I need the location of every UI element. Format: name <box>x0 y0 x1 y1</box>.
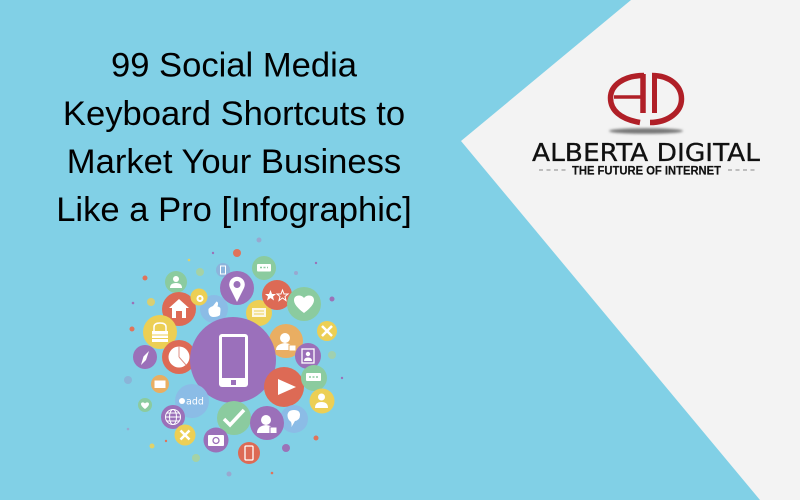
icon: gear <box>190 288 208 306</box>
title: Keyboard Shortcuts to <box>63 95 405 133</box>
icon: heart <box>287 287 321 321</box>
icon: mail <box>151 375 169 393</box>
icon: play <box>264 367 304 407</box>
icon: home <box>162 292 196 326</box>
icon: main phone <box>190 317 276 403</box>
icon: globe <box>161 405 185 429</box>
icon: user green <box>165 271 187 293</box>
icon: thumbs up <box>200 295 228 323</box>
icon: add <box>175 384 209 418</box>
icon: user orange <box>269 324 303 358</box>
logo tagline: THE FUTURE OF INTERNET <box>572 164 722 178</box>
icon: camera <box>204 428 228 452</box>
icon: check <box>217 401 251 435</box>
logo wordmark: ALBERTA DIGITAL <box>532 138 760 167</box>
icon: compass <box>133 345 157 369</box>
title: Market Your Business <box>67 143 401 181</box>
icon: close yellow lower <box>174 424 196 446</box>
icon: small heart <box>138 398 152 412</box>
logo: Alberta Digital <box>532 74 760 178</box>
icon: small phone <box>216 263 230 277</box>
icon: map pin <box>220 271 254 305</box>
title: 99 Social Media <box>111 46 358 84</box>
icon: stars <box>262 280 292 310</box>
icon: chat green <box>252 256 276 280</box>
logo mark: AD <box>610 74 682 122</box>
icon: user purple <box>250 406 284 440</box>
icon: close yellow <box>317 321 337 341</box>
decorative dots <box>124 238 343 476</box>
title <box>56 46 412 229</box>
icon: portrait <box>295 343 321 369</box>
social media icon cluster <box>124 238 343 476</box>
title: Like a Pro [Infographic] <box>56 191 412 229</box>
icon: thumbs down <box>280 405 308 433</box>
icon: lock <box>143 315 177 349</box>
tagline dashes <box>539 169 756 171</box>
icon: phone red <box>238 442 260 464</box>
icon: chat green right <box>301 365 327 391</box>
icon: chat yellow <box>246 300 272 326</box>
logo shadow <box>609 128 683 134</box>
icon: add: add <box>186 396 204 408</box>
icon: user yellow <box>310 388 334 414</box>
panel: white arrow shape <box>461 0 800 500</box>
icon: pie chart <box>162 340 196 374</box>
